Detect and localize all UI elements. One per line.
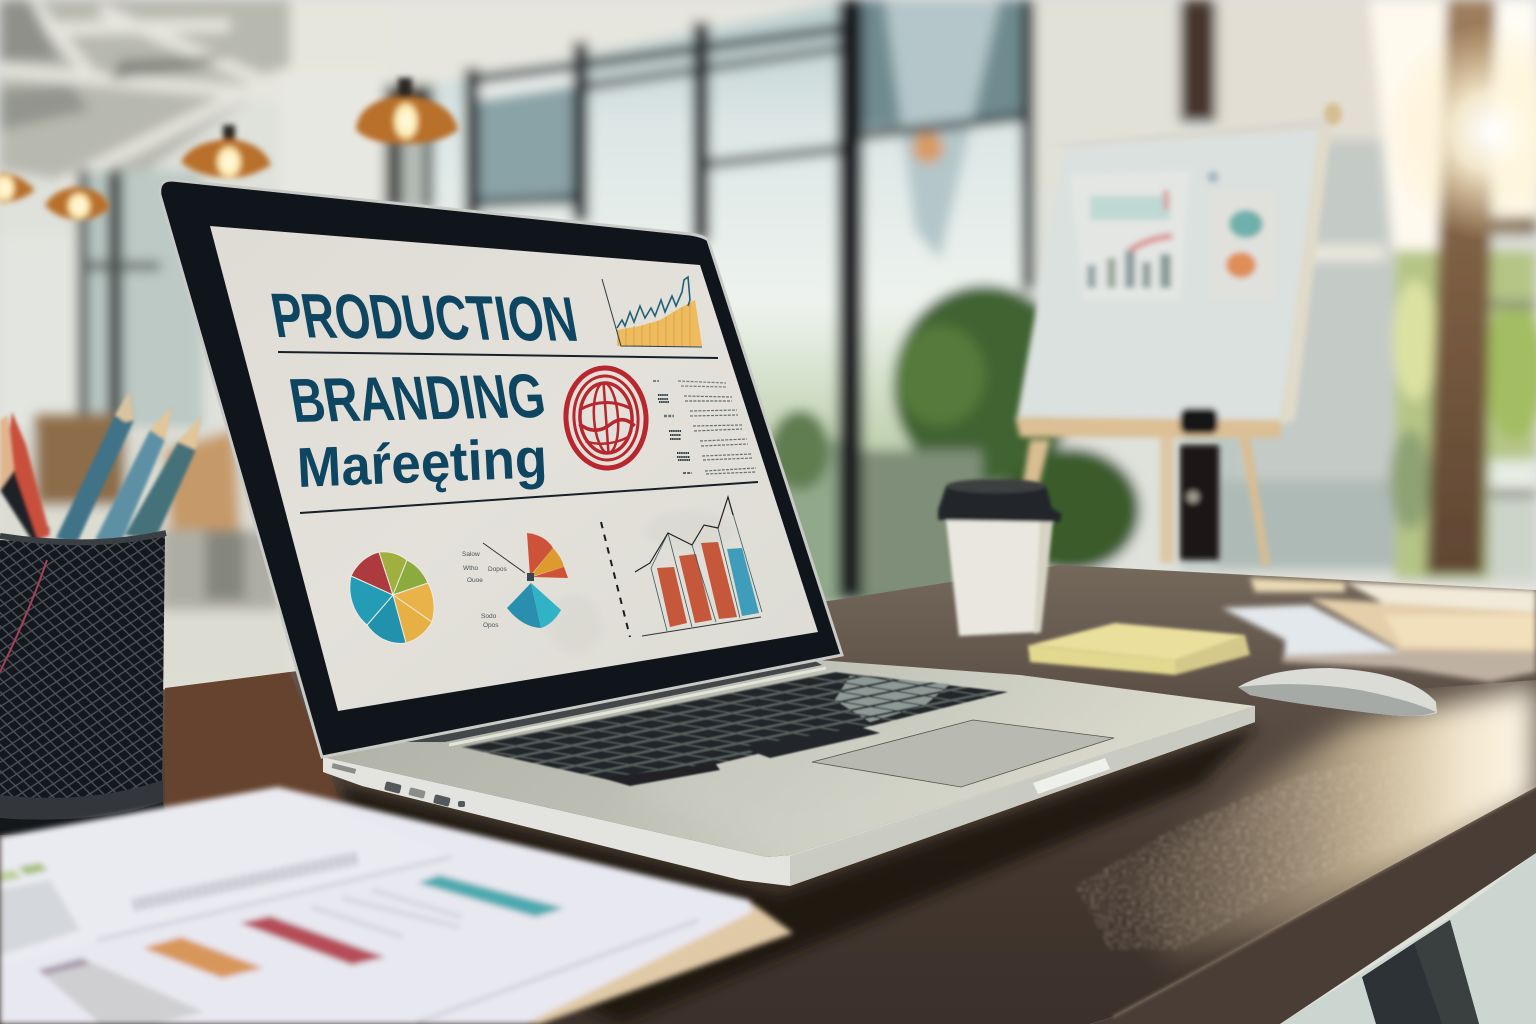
chart card [1070, 170, 1190, 300]
blurred text lines [311, 890, 462, 937]
pie chart [350, 552, 434, 643]
brick wall [1034, 0, 1184, 190]
left window [78, 170, 203, 430]
lamp 2 [181, 125, 271, 180]
pendant lamps [0, 78, 458, 221]
lamp 1 [356, 78, 458, 144]
pie chart labels [462, 551, 508, 629]
coffee cup [938, 479, 1062, 636]
pie chart labels: Wtho [463, 565, 479, 572]
sticky note pad [1028, 623, 1250, 675]
desk top [0, 565, 1536, 1024]
bar chart [635, 497, 762, 636]
report document foreground [0, 787, 793, 1024]
left background floor and chair [0, 415, 290, 685]
desk leg [1362, 920, 1479, 1024]
heading: BRANDING: BRANDING [285, 361, 550, 436]
right outdoor glass [1390, 250, 1536, 580]
sunlit curtain [1216, 0, 1420, 570]
laptop base [323, 660, 1255, 886]
upper cream ceiling band [270, 0, 850, 90]
trackpad [812, 720, 1114, 787]
windows [385, 0, 1035, 605]
pencil holder with pencils [0, 390, 201, 835]
heading: PRODUCTION: PRODUCTION [266, 281, 582, 355]
floor [1280, 853, 1536, 1024]
hinge band [400, 661, 822, 742]
desk edge highlight [1113, 787, 1536, 1017]
mesh cup [0, 535, 165, 808]
ceiling with beams [0, 0, 290, 190]
mouse [1238, 668, 1437, 716]
left white wall [0, 235, 78, 430]
lamp 3 [45, 187, 110, 221]
wood post [1426, 0, 1496, 575]
whiteboard on easel [1010, 103, 1342, 565]
pie chart labels: Opos [483, 622, 499, 629]
screen bullet text list [653, 381, 756, 474]
laptop [160, 180, 1255, 886]
laptop shadow [340, 725, 1260, 1024]
red bar [240, 916, 385, 965]
teal bar [418, 875, 564, 917]
pie chart labels: Salow [462, 551, 480, 558]
exploded pie chart [483, 533, 568, 628]
side card [1208, 190, 1276, 300]
divider one [278, 352, 718, 358]
production area chart [602, 277, 702, 347]
screen display [210, 226, 818, 711]
left blurred table [0, 880, 80, 955]
desk sunlight [1050, 685, 1536, 970]
pie chart labels: Dopos [488, 566, 508, 573]
front latch [1033, 758, 1110, 794]
dashed separator [601, 522, 630, 637]
plant [712, 285, 1140, 600]
lamp 4 [0, 172, 35, 203]
ports [332, 763, 465, 807]
green marks [18, 863, 48, 875]
papers and folder [1222, 578, 1536, 682]
icon: red globe [563, 365, 649, 471]
divider two [300, 482, 758, 513]
pencils [0, 390, 201, 545]
orange bar [143, 937, 263, 978]
desk side edge [1090, 787, 1536, 1024]
pie chart labels: Sodo [481, 613, 497, 620]
keyboard [461, 672, 1008, 786]
desk warm left area [165, 672, 340, 810]
screen lid [160, 180, 842, 757]
chart paper texture [547, 510, 735, 655]
pie chart labels: Ouoe [467, 577, 483, 584]
blurred text strip [133, 858, 357, 905]
gray bar [38, 958, 204, 1024]
white column [280, 68, 385, 208]
heading: Marketing: Maŕeęting [295, 426, 549, 499]
sun glare [1382, 22, 1536, 242]
